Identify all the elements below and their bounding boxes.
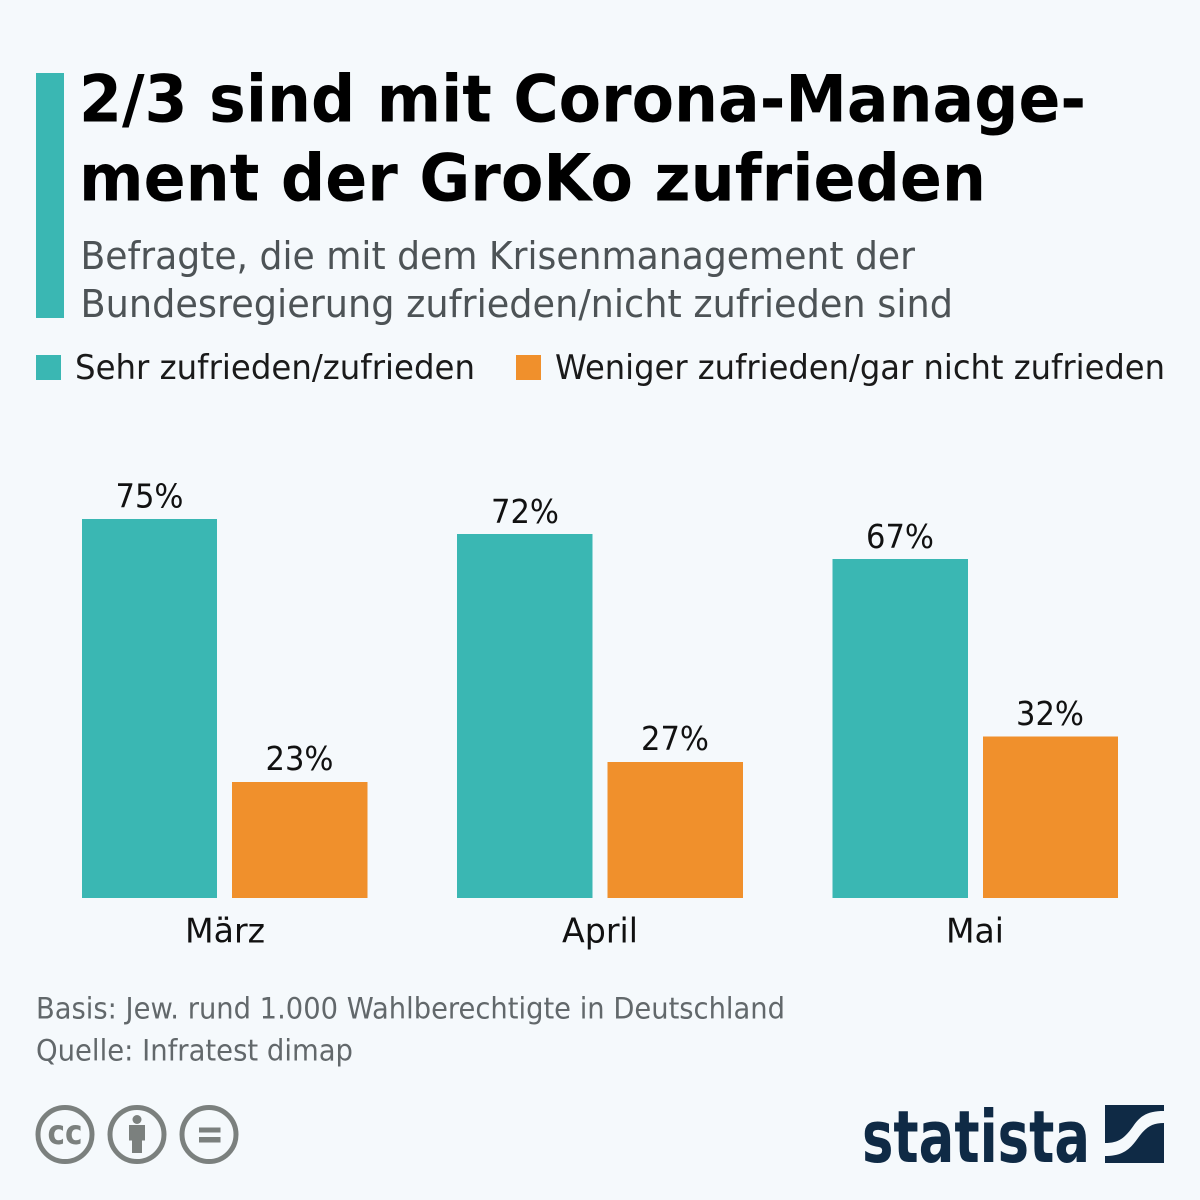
category: März: März: [185, 912, 265, 952]
group: März: [82, 476, 368, 952]
group: April: [457, 492, 743, 952]
category: Mai: Mai: [946, 912, 1004, 952]
bar chart: [82, 476, 1118, 952]
value: 67%: 67%: [866, 517, 934, 556]
legend label: satisfied: Sehr zufrieden/zufrieden: [75, 348, 475, 388]
subtitle: Bundesregierung zufrieden/nicht zufrieden sind: [80, 282, 953, 326]
value: 75%: 75%: [116, 476, 184, 516]
icon: attribution: [110, 1108, 164, 1162]
category: April: April: [562, 912, 638, 952]
title: [79, 62, 1086, 216]
value: 27%: 27%: [641, 719, 709, 758]
title: ment der GroKo zufrieden: [79, 142, 986, 216]
subtitle: Befragte, die mit dem Krisenmanagement der: [80, 234, 915, 278]
icon: no derivatives: [182, 1108, 236, 1162]
legend label: not satisfied: Weniger zufrieden/gar nicht zufrieden: [555, 348, 1165, 388]
legend swatch: satisfied: [36, 355, 61, 380]
value: 72%: 72%: [491, 492, 559, 531]
bar: März satisfied: [82, 519, 217, 898]
source note: Quelle: Infratest dimap: [36, 1034, 353, 1068]
logo mark: [1105, 1105, 1164, 1163]
legend: [36, 348, 1165, 388]
title: 2/3 sind mit Corona-Manage-: [79, 62, 1086, 138]
logo: statista: [862, 1095, 1164, 1179]
value: 23%: 23%: [266, 739, 334, 778]
legend swatch: not satisfied: [516, 355, 541, 380]
icon: creative commons: cc: [48, 1113, 82, 1153]
group: Mai: [832, 517, 1118, 952]
bar: März not satisfied: [232, 782, 368, 898]
bar: April not satisfied: [608, 762, 743, 898]
bar: Mai not satisfied: [983, 736, 1118, 898]
logo wordmark: statista: [862, 1095, 1090, 1179]
subtitle: [80, 234, 953, 326]
title accent bar: [36, 73, 64, 318]
value: 32%: 32%: [1016, 694, 1084, 733]
source note: Basis: Jew. rund 1.000 Wahlberechtigte in Deutschland: [36, 992, 785, 1026]
source note: [36, 992, 785, 1068]
bar: Mai satisfied: [832, 559, 968, 898]
bar: April satisfied: [457, 534, 592, 898]
icon: creative commons: [38, 1108, 92, 1162]
